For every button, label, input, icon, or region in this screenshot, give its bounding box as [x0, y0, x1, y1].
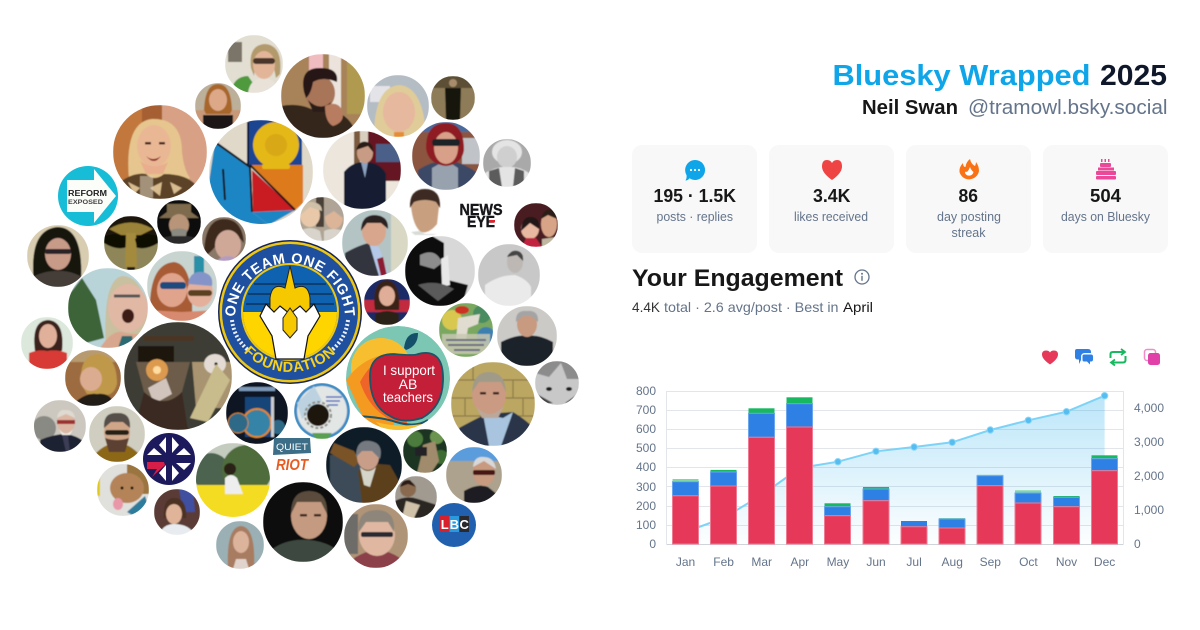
- avatar: Quiet Riot logo: RIOT: [276, 457, 309, 474]
- avatar: LBC logo: B: [450, 517, 459, 532]
- avatar: curly blonde woman: [65, 350, 121, 406]
- profile name and handle: Neil Swan: [862, 97, 958, 119]
- avatar: smiling man in dark shirt: [497, 306, 557, 366]
- cumulative line: [686, 392, 1108, 532]
- month labels: Sep: [980, 555, 1001, 569]
- avatar: News Eye wordmark: [460, 202, 502, 231]
- avatar: I support AB teachers apple: I support: [383, 362, 435, 378]
- right axis labels: 0: [1134, 537, 1141, 551]
- avatar: woman with long hair: [216, 521, 264, 569]
- avatar: I support AB teachers apple: [346, 326, 450, 432]
- avatar: tapestry artwork: [209, 120, 313, 225]
- avatar: I support AB teachers apple: AB: [399, 376, 417, 392]
- bar: April: [786, 397, 812, 544]
- stat card: day posting streak: day posting: [937, 209, 1001, 224]
- avatar: woman before US flag: [364, 279, 410, 325]
- stat card: posts and replies: 195 · 1.5K: [654, 186, 736, 206]
- month labels: Oct: [1019, 555, 1038, 569]
- avatar: LBC logo: L: [441, 517, 449, 532]
- avatar: black-and-white shadowed figure: [405, 236, 475, 306]
- icon: legend quotes: [1144, 350, 1160, 365]
- avatar: navy and red compass star logo: [143, 433, 195, 485]
- avatar: man in navy suit: [323, 131, 401, 209]
- bar: January: [672, 479, 698, 544]
- bar: February: [710, 470, 736, 544]
- right axis labels: 2,000: [1134, 469, 1164, 483]
- avatar: man with sunglasses and blue sky: [446, 447, 502, 503]
- avatar: Ukrainian One Team One Fight Foundation badge: FOUNDATION: [244, 346, 336, 372]
- stat card: days on Bluesky: 504: [1090, 186, 1121, 206]
- month labels: Nov: [1056, 555, 1077, 569]
- profile name and handle: @tramowl.bsky.social: [968, 97, 1168, 119]
- avatar: dark-haired man with hand on chin: [281, 54, 365, 138]
- avatar: Quiet Riot logo: [273, 438, 311, 474]
- stacked bars: [672, 397, 1118, 544]
- month labels: Dec: [1094, 555, 1115, 569]
- stat card: day posting streak: 86: [958, 186, 978, 206]
- bar: October: [1015, 490, 1041, 544]
- avatar: blonde woman selfie: [367, 75, 429, 137]
- avatar: small figure in black standing: [431, 76, 475, 120]
- left axis labels: 200: [636, 499, 656, 513]
- icon: birthday cake: [1096, 159, 1116, 180]
- avatar: tan dog with tongue out: [97, 464, 149, 518]
- right axis labels: 4,000: [1134, 401, 1164, 415]
- month labels: [676, 555, 1115, 569]
- stat card: days on Bluesky: days on Bluesky: [1061, 209, 1150, 224]
- avatar: person with camera among leaves: [403, 429, 448, 473]
- avatar: woman in red floral dress: [21, 317, 73, 369]
- stat card: days on Bluesky: [1043, 145, 1168, 253]
- avatar: Ukrainian One Team One Fight Foundation badge: [218, 240, 362, 384]
- stat card: day posting streak: streak: [952, 225, 986, 240]
- month labels: Apr: [790, 555, 809, 569]
- avatar: Reform Exposed logo: REFORM: [68, 188, 107, 198]
- avatar: golden helmet: [104, 216, 158, 270]
- stat card: likes received: likes received: [794, 209, 868, 224]
- avatar: two women with sunglasses: [147, 251, 217, 321]
- cumulative area: [686, 396, 1105, 544]
- left axis labels: 300: [636, 480, 656, 494]
- avatar: white-haired man with red glasses: [32, 400, 86, 452]
- month labels: Jan: [676, 555, 695, 569]
- engagement summary text: 4.4K: [632, 299, 661, 315]
- icon: info: [855, 270, 869, 284]
- left axis labels: 400: [636, 460, 656, 474]
- icon: heart: [822, 160, 842, 180]
- avatar: smiling blonde woman: [113, 105, 207, 199]
- avatar: woman with curly black hair and glasses: [27, 225, 89, 287]
- left axis labels: 500: [636, 441, 656, 455]
- chart: monthly engagement stacked bars with cumulative area: [636, 384, 1164, 569]
- bar: September: [977, 475, 1003, 544]
- stat card: likes received: 3.4K: [813, 186, 850, 206]
- avatar: earth book promo: [226, 382, 288, 444]
- avatar: two smiling women: [300, 197, 344, 241]
- avatar: circular sticker with dark figure: [294, 383, 350, 439]
- avatar: News Eye wordmark: NEWS: [460, 202, 502, 219]
- avatar: LBC logo: C: [460, 517, 470, 532]
- bar: July: [901, 521, 927, 544]
- stat card: day posting streak: [906, 145, 1031, 253]
- engagement summary text: April: [843, 299, 873, 315]
- left axis labels: 600: [636, 422, 656, 436]
- left axis labels: 100: [636, 518, 656, 532]
- avatar: woman at rally: [154, 489, 200, 535]
- avatar: I support AB teachers apple: teachers: [383, 389, 433, 405]
- left axis labels: 0: [649, 537, 656, 551]
- icon: legend reposts: [1110, 349, 1126, 366]
- stat card: posts and replies: [632, 145, 757, 253]
- month labels: Jun: [866, 555, 886, 569]
- avatar: man in hoodie lying down: [395, 476, 437, 518]
- month labels: May: [827, 555, 849, 569]
- avatar: father and daughter photo: [514, 203, 558, 247]
- icon: legend heart: [1042, 350, 1058, 364]
- left axis labels: 700: [636, 403, 656, 417]
- avatar: woman with dark hair: [202, 217, 246, 261]
- title: Bluesky Wrapped 2025: Bluesky Wrapped: [832, 60, 1090, 92]
- right axis labels: 3,000: [1134, 435, 1164, 449]
- right axis labels: 1,000: [1134, 503, 1164, 517]
- avatar: News Eye wordmark: EYE: [467, 214, 495, 231]
- avatar: man with red hood and sunglasses: [412, 122, 480, 190]
- avatar: Reform Exposed logo: [58, 166, 118, 226]
- left axis labels: 800: [636, 384, 656, 398]
- avatar: man against brick wall: [451, 362, 535, 446]
- avatar: person in yellow rapeseed field: [192, 443, 272, 519]
- avatar: cutout man's head: [410, 189, 440, 235]
- avatar: woman with open mouth, tree background: [68, 268, 148, 348]
- bar: May: [824, 503, 850, 544]
- bar: August: [939, 518, 965, 544]
- left axis labels: [636, 384, 656, 551]
- bar: June: [863, 487, 889, 544]
- avatar: glass of wine with dog by candlelight: [124, 322, 232, 430]
- avatar: grey-scale elderly woman: [483, 139, 531, 187]
- icon: flame: [959, 159, 979, 179]
- avatar: bearded man in round glasses: [89, 406, 145, 462]
- stat card: likes received: [769, 145, 894, 253]
- profile name and handle: [862, 97, 1168, 119]
- right axis labels: [1134, 401, 1164, 551]
- avatar: Quiet Riot logo: QUIET: [276, 442, 308, 453]
- avatar: small woman with red-brown hair: [195, 83, 241, 129]
- icon: speech bubble: [685, 160, 705, 180]
- avatar: Reform Exposed logo: EXPOSED: [68, 199, 103, 206]
- bar: March: [748, 408, 774, 544]
- bar: November: [1054, 496, 1080, 544]
- avatar: LBC logo: [432, 503, 476, 547]
- avatar: stage actor in a green coat with white beard: [326, 427, 402, 503]
- month labels: Feb: [713, 555, 734, 569]
- avatar: grey-haired man with glasses: [344, 504, 408, 568]
- avatar bubble cluster: [21, 35, 579, 569]
- avatar: greyhound in red hat painting: [439, 303, 495, 357]
- bar: December: [1092, 455, 1118, 544]
- chart legend icons: [1042, 349, 1160, 366]
- avatar: man on dark background in grey-green shirt: [263, 482, 343, 562]
- avatar: cat greyscale: [535, 361, 579, 405]
- avatar: bald man in white shirt, greyscale: [478, 244, 540, 306]
- avatar: smiling man in suit and red tie: [342, 210, 408, 276]
- engagement summary text: total · 2.6 avg/post · Best in: [664, 299, 838, 315]
- stat card: posts and replies: posts · replies: [656, 209, 733, 224]
- title: Bluesky Wrapped 2025: 2025: [1100, 60, 1167, 92]
- month labels: Aug: [942, 555, 963, 569]
- heading: Your Engagement: Your Engagement: [632, 265, 843, 292]
- month labels: Mar: [751, 555, 772, 569]
- avatar: woman with glasses, green top: [225, 35, 283, 93]
- avatar: Ukrainian One Team One Fight Foundation badge: ONE TEAM ONE FIGHT: [225, 253, 356, 316]
- icon: legend replies: [1075, 349, 1093, 364]
- avatar: man with brown hat: [157, 200, 201, 244]
- month labels: Jul: [906, 555, 922, 569]
